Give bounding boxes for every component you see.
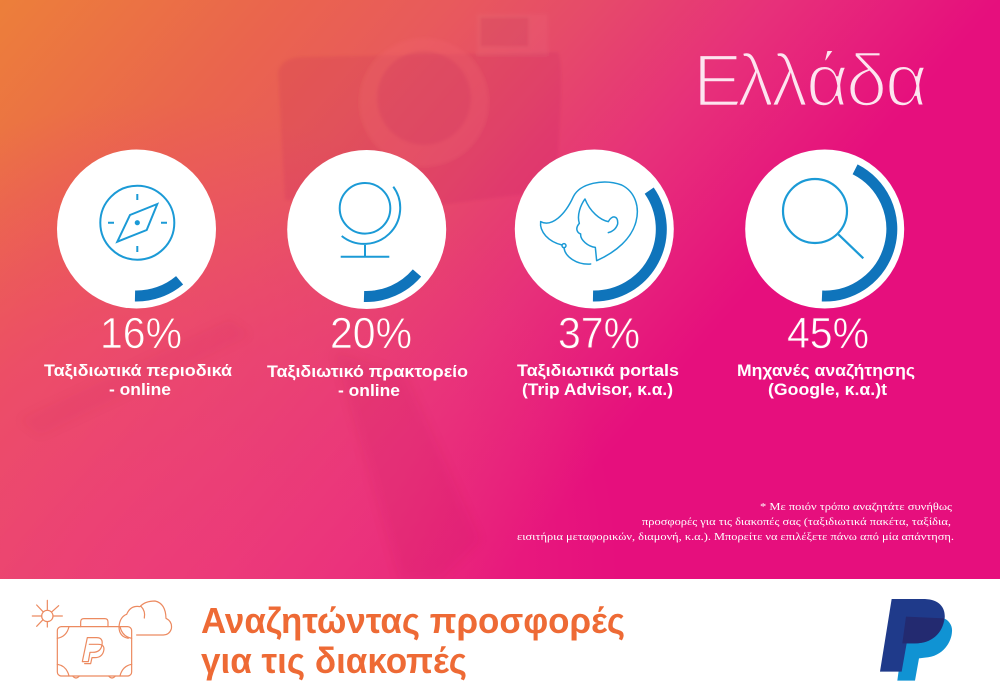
progress circle 37% <box>515 150 674 308</box>
icon: woman profile <box>541 182 637 264</box>
footnote <box>517 501 954 543</box>
icon: magnifier <box>783 179 863 258</box>
progress circle 45% <box>745 150 904 308</box>
heading <box>201 600 625 681</box>
footnote: προσφορές για τις διακοπές σας (ταξιδιωτικά πακέτα, ταξίδια, <box>642 516 951 528</box>
heading: για τις διακοπές <box>201 640 467 681</box>
label: Ταξιδιωτικά περιοδικά <box>44 361 233 380</box>
value 37%: 37% <box>558 309 640 358</box>
panel: travel agency <box>267 150 468 400</box>
label: (Google, κ.α.)t <box>768 380 887 399</box>
label <box>517 361 679 399</box>
title: Ελλάδα <box>693 39 928 122</box>
label: - online <box>338 381 400 400</box>
label <box>267 362 468 400</box>
footer band <box>0 579 1000 700</box>
icon: compass <box>100 186 174 260</box>
progress circle 20% <box>287 150 446 309</box>
label: Ταξιδιωτικό πρακτορείο <box>267 362 468 381</box>
value 45%: 45% <box>787 309 869 358</box>
progress circle 16% <box>57 150 216 308</box>
label <box>737 361 915 399</box>
label: - online <box>109 380 171 399</box>
label: Μηχανές αναζήτησης <box>737 361 915 380</box>
label: Ταξιδιωτικά portals <box>517 361 679 380</box>
label <box>44 361 233 399</box>
footnote: εισιτήρια μεταφορικών, διαμονή, κ.α.). Μπορείτε να επιλέξετε πάνω από μία απάντηση. <box>517 531 954 543</box>
photo: camera <box>278 14 561 205</box>
panel: search engines <box>737 150 915 399</box>
label: (Trip Advisor, κ.α.) <box>522 380 673 399</box>
heading: Αναζητώντας προσφορές <box>201 600 625 641</box>
value 20%: 20% <box>330 309 412 358</box>
icon: PayPal logo <box>880 599 952 681</box>
panel: travel portals <box>515 150 679 399</box>
value 16%: 16% <box>100 309 182 358</box>
icon: globe <box>340 183 400 257</box>
footnote: * Με ποιόν τρόπο αναζητάτε συνήθως <box>760 501 953 513</box>
photo: map sheets <box>20 320 480 579</box>
panel: travel magazines <box>44 150 233 399</box>
icon: suitcase with sun and cloud <box>32 600 172 678</box>
